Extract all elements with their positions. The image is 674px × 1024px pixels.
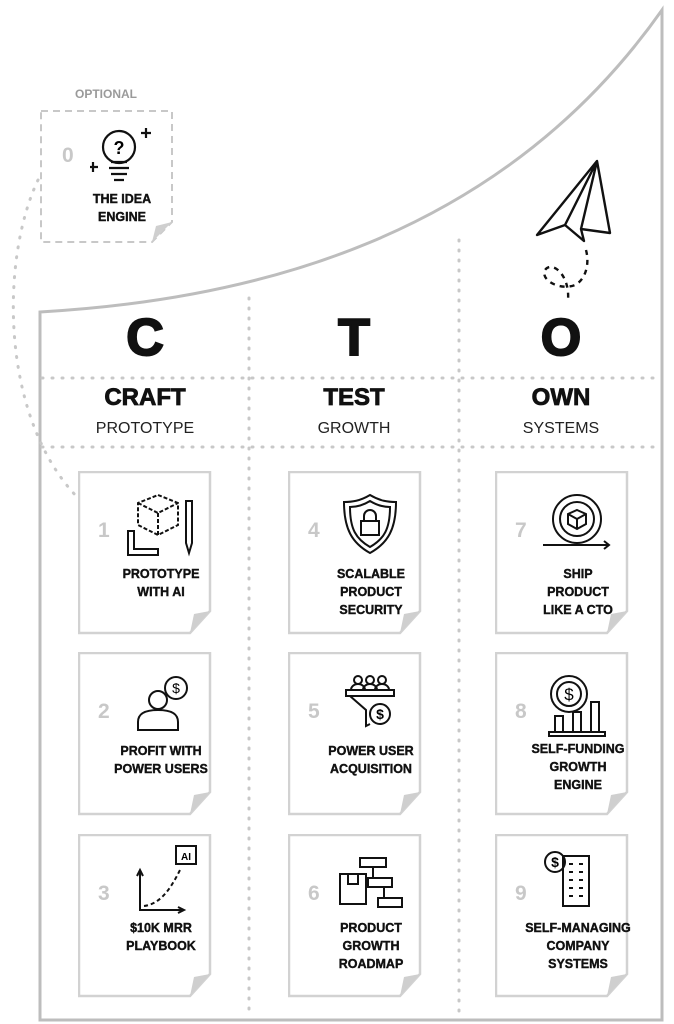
text: SYSTEMS (523, 420, 599, 437)
icon: growth chart with AI chip: AI (181, 852, 191, 863)
card 6: ROADMAP (339, 957, 403, 971)
card 1: PROTOTYPE (123, 567, 199, 581)
card 9: 9 (515, 882, 527, 905)
card 2: PROFIT WITH (120, 744, 202, 758)
icon: roadmap boxes (339, 857, 403, 908)
card 0: the idea engine: THE IDEA (93, 192, 151, 206)
card 7: SHIP (563, 567, 593, 581)
card 4: PRODUCT (340, 585, 402, 599)
card 9: SELF-MANAGING (525, 921, 631, 935)
column heading: craft: CRAFT (104, 384, 186, 411)
card 7 (495, 471, 628, 634)
card 9: SYSTEMS (548, 957, 608, 971)
icon: dollar with bars: $ (564, 685, 574, 704)
card 8 (495, 652, 628, 816)
card 4: SECURITY (339, 603, 403, 617)
icon: user with dollar (137, 676, 188, 731)
text: PROTOTYPE (96, 420, 194, 437)
card 4: 4 (308, 519, 320, 542)
card 7: PRODUCT (547, 585, 609, 599)
icon: lightbulb (90, 128, 151, 182)
icon: dollar with bars (548, 675, 606, 737)
card 3: PLAYBOOK (126, 939, 196, 953)
card 2: POWER USERS (114, 762, 208, 776)
card 5 (288, 652, 422, 816)
card 6 (288, 834, 422, 998)
icon: user with dollar: $ (172, 680, 180, 696)
icon: cycle box (543, 494, 610, 550)
card 8: ENGINE (554, 778, 602, 792)
icon: lightbulb: ? (114, 138, 124, 158)
card 2 (78, 652, 212, 816)
text: GROWTH (318, 420, 390, 437)
icon: shield with lock (343, 494, 397, 554)
card 5: ACQUISITION (330, 762, 412, 776)
card 2: 2 (98, 700, 110, 723)
icon: building with dollar (544, 851, 590, 907)
card 7: 7 (515, 519, 527, 542)
card 6: 6 (308, 882, 320, 905)
card 9: COMPANY (547, 939, 609, 953)
card 3: 3 (98, 882, 110, 905)
card 8: 8 (515, 700, 527, 723)
icon: funnel with users (345, 675, 395, 728)
icon: box and ruler (127, 494, 193, 556)
card 0: the idea engine: ENGINE (98, 210, 146, 224)
icon: building with dollar: $ (551, 854, 559, 870)
card 7: LIKE A CTO (543, 603, 613, 617)
card 0: the idea engine: 0 (62, 144, 74, 167)
card 9 (495, 834, 631, 998)
column heading: test: TEST (323, 384, 385, 411)
card 8: SELF-FUNDING (531, 742, 625, 756)
card 1: WITH AI (137, 585, 185, 599)
text: O (541, 309, 581, 367)
card 1: 1 (98, 519, 110, 542)
card 3 (78, 834, 212, 998)
icon: paper plane (536, 160, 612, 298)
card 5: POWER USER (328, 744, 414, 758)
card 1 (78, 471, 212, 634)
optional label: OPTIONAL (75, 87, 137, 101)
card 3: $10K MRR (130, 921, 192, 935)
card 5: 5 (308, 700, 320, 723)
column letters: C (126, 309, 164, 367)
card 4: SCALABLE (337, 567, 405, 581)
column heading: own: OWN (532, 384, 590, 411)
card 8: GROWTH (550, 760, 606, 774)
icon: growth chart with AI chip (136, 845, 197, 914)
card 0: the idea engine (40, 110, 173, 243)
icon: funnel with users: $ (376, 706, 384, 722)
card 6: PRODUCT (340, 921, 402, 935)
text: T (338, 309, 370, 367)
card 6: GROWTH (343, 939, 399, 953)
card 4 (288, 471, 422, 634)
